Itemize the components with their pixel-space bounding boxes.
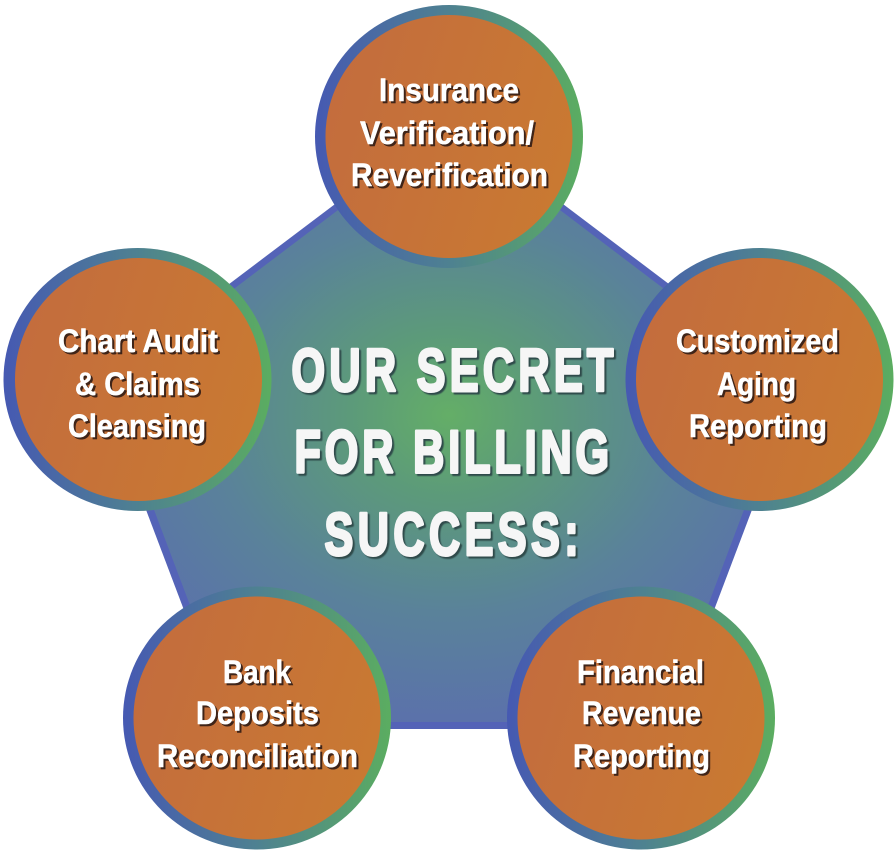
title: our secret for billing success: OUR SECRET (292, 338, 613, 405)
circle: financial revenue reporting: Financial (577, 654, 704, 690)
circle: bank deposits reconciliation: Bank (223, 654, 292, 690)
title: our secret for billing success: FOR BILLING (294, 420, 609, 486)
circle: insurance verification (315, 5, 583, 268)
title: our secret for billing success: SUCCESS: (324, 502, 579, 569)
circle: customized aging reporting (626, 248, 894, 511)
circle: customized aging reporting: Aging (717, 366, 796, 402)
circle: bank deposits reconciliation: Deposits (196, 695, 319, 731)
circle: financial revenue reporting: Reporting (573, 738, 710, 774)
circle: bank deposits reconciliation (123, 586, 391, 850)
circle: insurance verification: Verification/ (360, 115, 534, 151)
circle: chart audit and claims cleansing (4, 248, 272, 511)
circle: customized aging reporting: Customized (676, 323, 839, 359)
title: our secret for billing success (292, 338, 613, 569)
circle: insurance verification: Reverification (351, 157, 548, 193)
circle: customized aging reporting: Reporting (689, 408, 827, 444)
circle: insurance verification: Insurance (379, 72, 519, 108)
circle: financial revenue reporting: Revenue (582, 695, 701, 731)
circle: financial revenue reporting (507, 586, 775, 850)
circle: chart audit and claims cleansing: Chart Audit (58, 323, 218, 359)
pentagon background (98, 118, 800, 729)
circle: chart audit and claims cleansing: Cleansing (68, 408, 206, 444)
circle: bank deposits reconciliation: Reconciliation (157, 738, 358, 774)
circle: chart audit and claims cleansing: & Claims (75, 366, 200, 402)
